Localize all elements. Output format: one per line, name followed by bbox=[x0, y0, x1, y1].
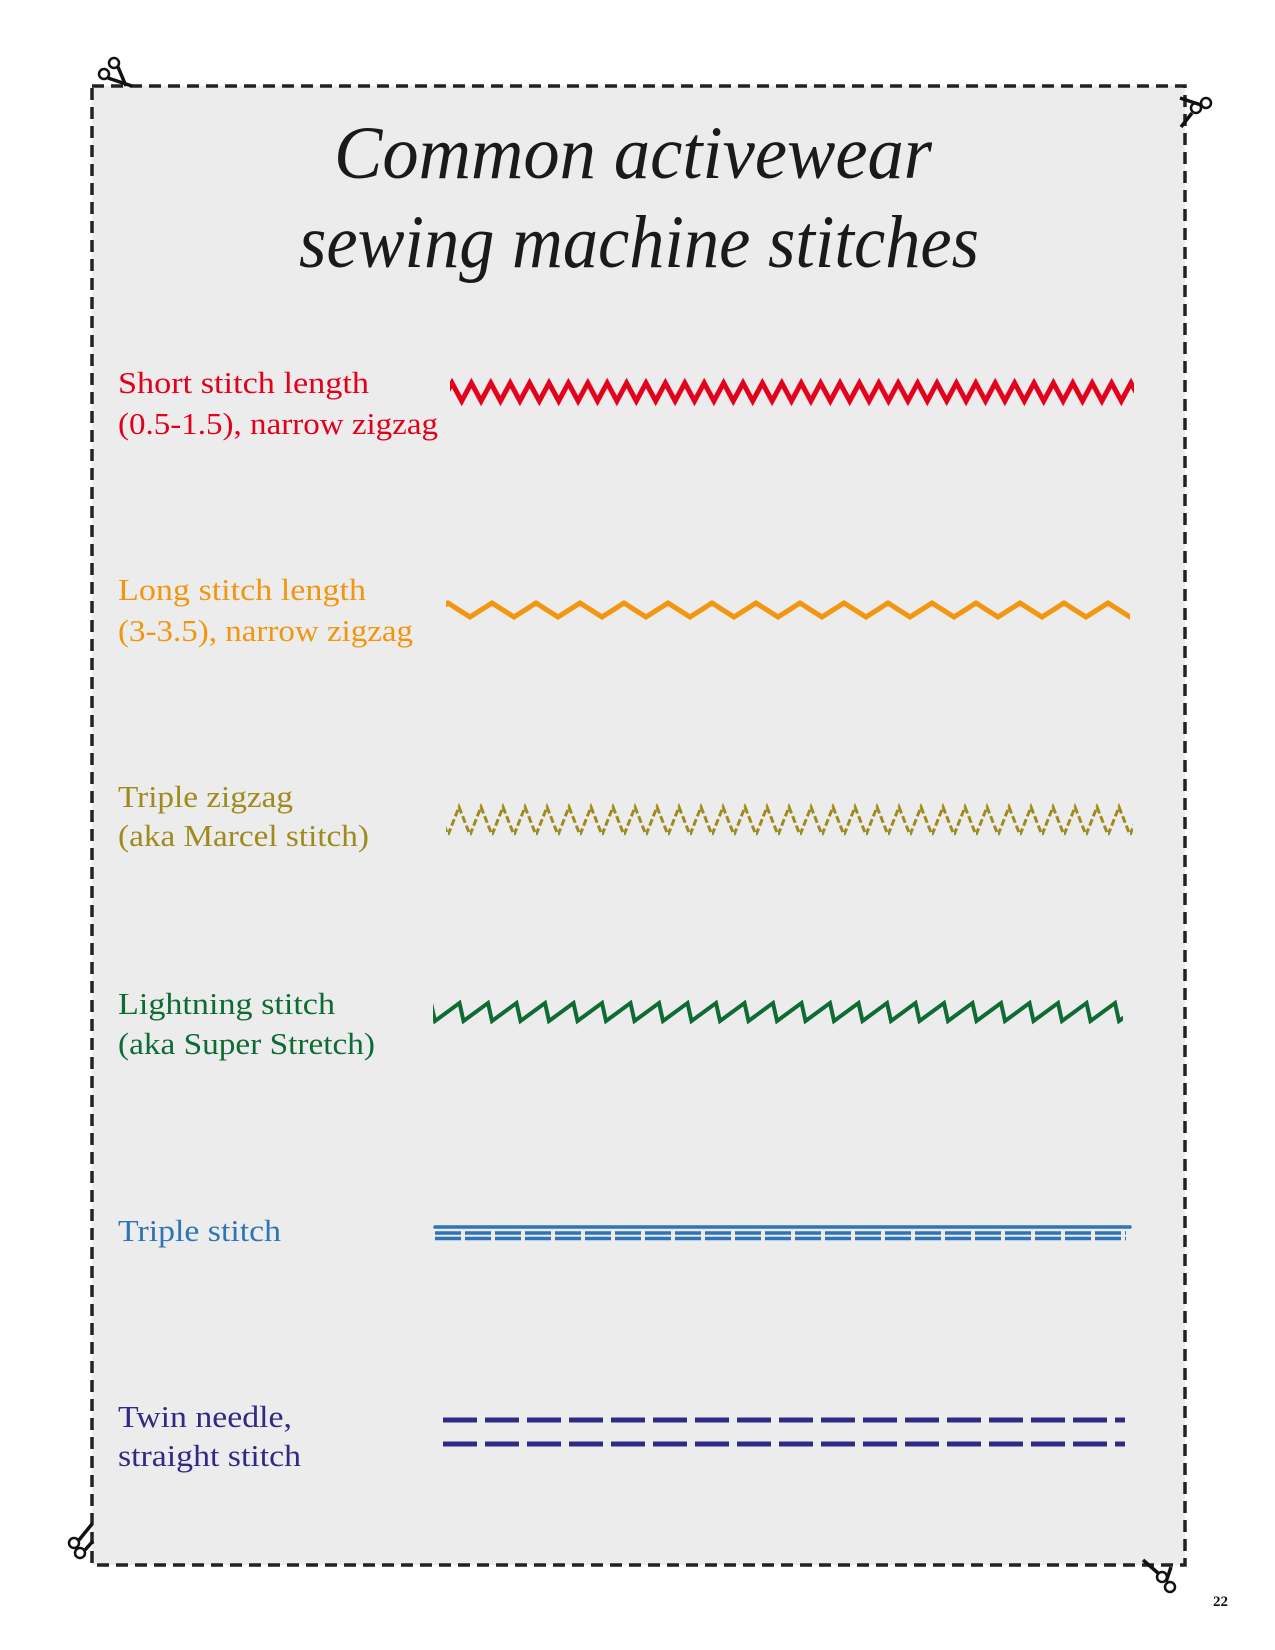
label: twin needle bbox=[118, 1399, 302, 1473]
title: Common activewear bbox=[334, 112, 933, 195]
label: lightning: (aka Super Stretch) bbox=[118, 1026, 375, 1061]
label: triple zigzag bbox=[118, 779, 369, 853]
label: long stitch: Long stitch length bbox=[118, 572, 367, 607]
label: twin needle: straight stitch bbox=[118, 1438, 302, 1473]
stitch: triple zigzag bbox=[446, 797, 1133, 847]
stitch: twin needle bbox=[443, 1420, 1125, 1444]
icon: scissors bottom-right bbox=[1143, 1560, 1175, 1592]
label: long stitch: (3-3.5), narrow zigzag bbox=[118, 613, 413, 648]
title: sewing machine stitches bbox=[299, 201, 979, 284]
label: short stitch bbox=[118, 365, 438, 441]
icon: scissors top-right bbox=[1180, 98, 1211, 127]
icon: scissors bottom-left bbox=[69, 1524, 93, 1558]
label: short stitch: Short stitch length bbox=[118, 365, 370, 400]
stitch: triple straight bbox=[435, 1227, 1130, 1238]
label: triple zigzag: (aka Marcel stitch) bbox=[118, 818, 369, 853]
stitch: lightning bbox=[433, 990, 1123, 1030]
label: long stitch bbox=[118, 572, 413, 648]
icon: scissors top-left bbox=[99, 58, 132, 86]
label: triple stitch: Triple stitch bbox=[118, 1213, 282, 1248]
stitch: orange long zigzag bbox=[446, 590, 1130, 630]
label: triple zigzag: Triple zigzag bbox=[118, 779, 293, 814]
label: lightning: Lightning stitch bbox=[118, 986, 336, 1021]
title bbox=[299, 112, 979, 284]
stitch: red short zigzag bbox=[450, 372, 1134, 412]
label: twin needle: Twin needle, bbox=[118, 1399, 292, 1434]
label: lightning bbox=[118, 986, 375, 1061]
label: short stitch: (0.5-1.5), narrow zigzag bbox=[118, 406, 438, 441]
page number: 22 bbox=[1213, 1594, 1228, 1610]
panel: dashed cut-out card bbox=[92, 86, 1185, 1565]
